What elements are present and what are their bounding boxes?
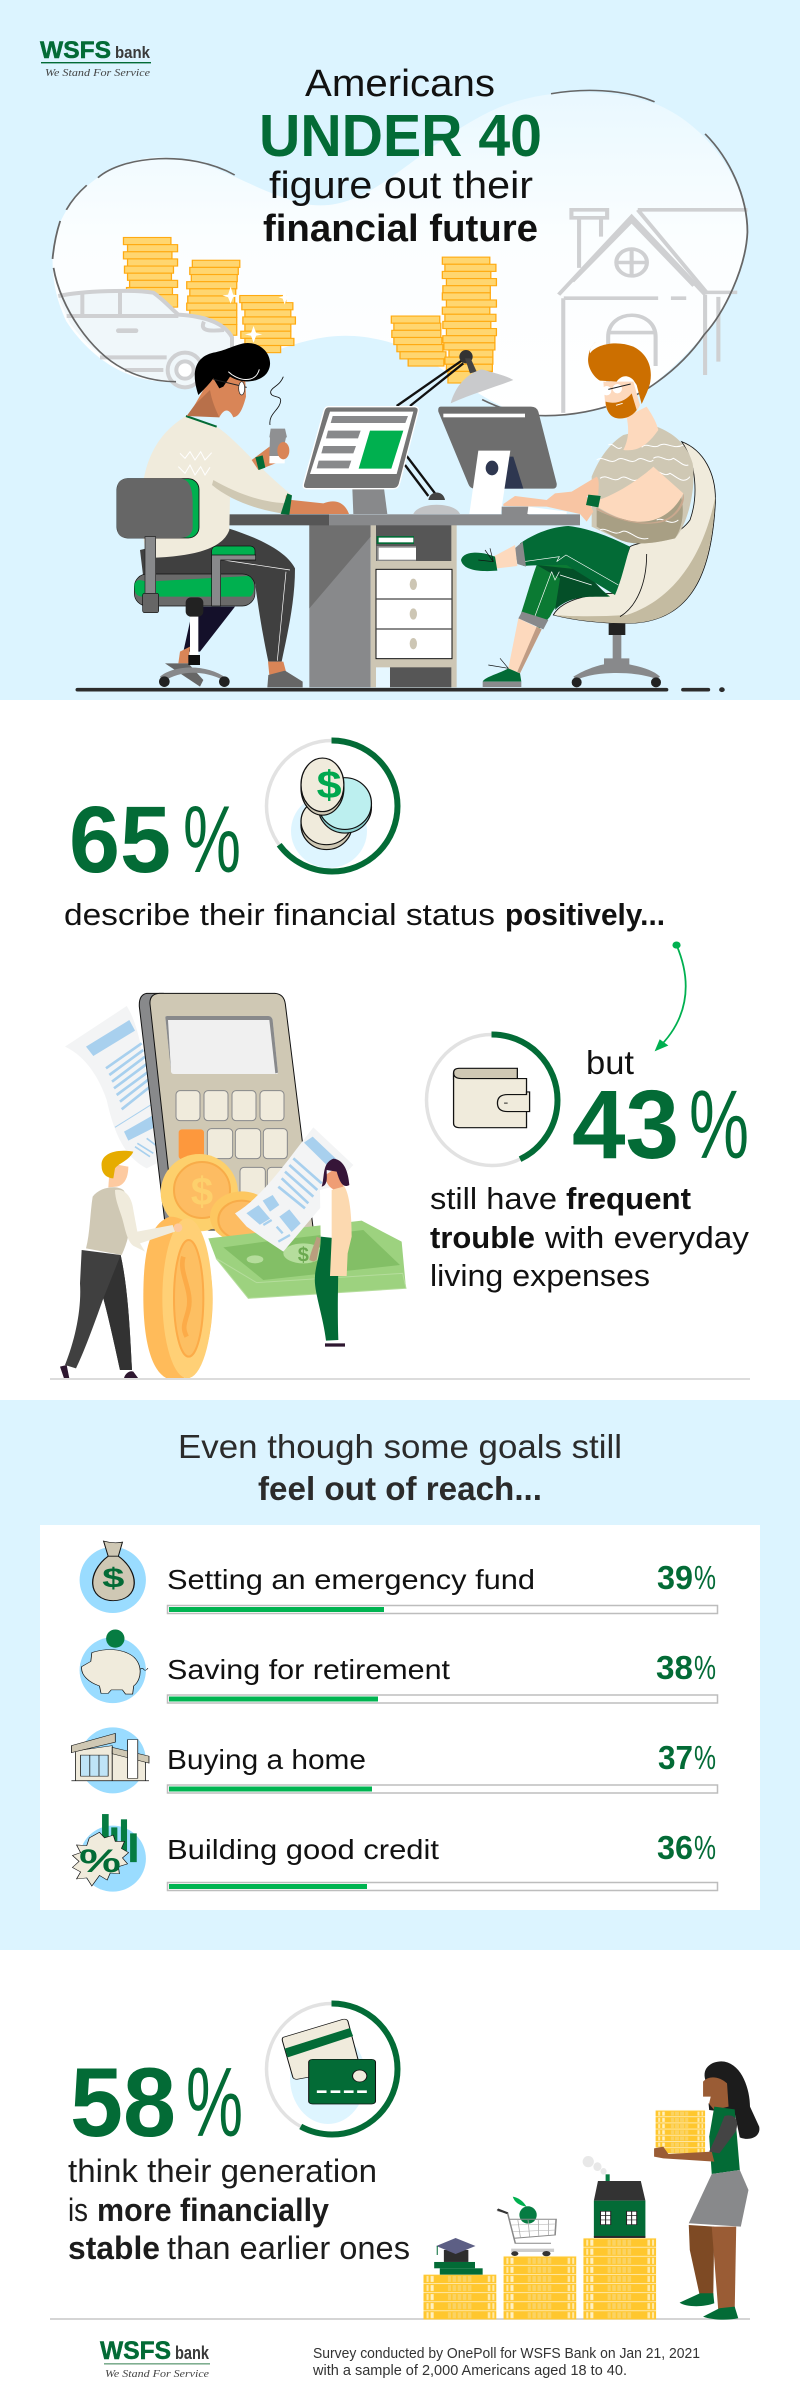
stat: 58 percent: % (186, 2047, 243, 2157)
coin stacks (423, 2238, 656, 2320)
icon: credit percent badge (72, 1814, 146, 1892)
stat: 58 percent: 58 (70, 2047, 176, 2157)
logo: WSFS bank (footer): bank (175, 2343, 210, 2363)
divider (50, 2318, 750, 2320)
text: more financially stable (68, 2153, 410, 2266)
row: credit: % (694, 1829, 716, 1866)
text: frequent trouble: living expenses (430, 1258, 650, 1293)
text: more financially stable: more financially (97, 2192, 329, 2228)
row: home: 37 (658, 1739, 693, 1776)
progress bar 36 (168, 1882, 718, 1890)
arrow: curved green (655, 942, 686, 1051)
shopping cart with apple (497, 2197, 556, 2256)
logo: WSFS bank (footer): We Stand For Service (105, 2368, 209, 2380)
legs and feet (493, 545, 517, 569)
text: frequent trouble: with everyday (544, 1220, 750, 1255)
right monitor (438, 407, 557, 514)
text: more financially stable: is (68, 2192, 88, 2228)
shirt (592, 427, 694, 543)
icon: credit cards (282, 2019, 376, 2104)
progress bar 39 (168, 1606, 718, 1614)
icon: wallet (454, 1068, 530, 1128)
logo: WSFS bank (top): bank (115, 43, 150, 62)
row: credit: 36 (657, 1829, 693, 1866)
heading: goals: Even though some goals still (178, 1428, 622, 1465)
title (259, 63, 542, 250)
blob sketch outline (53, 90, 747, 416)
heading: goals: feel out of reach... (258, 1470, 542, 1507)
heading: goals (178, 1428, 622, 1507)
ring chart: 58 percent with cards (266, 2004, 398, 2134)
ring chart: 43 percent with wallet (426, 1034, 558, 1166)
cash: $ (298, 1245, 309, 1267)
row: retirement (80, 1629, 718, 1703)
sweater (141, 416, 292, 558)
row: credit (72, 1814, 718, 1892)
cuffs (515, 542, 526, 567)
ring chart: 65 percent with coins (266, 740, 398, 872)
divider (50, 1378, 750, 1380)
stat: but 43 percent (572, 1044, 749, 1179)
text: describe positively: positively... (505, 897, 665, 932)
house outline (559, 210, 747, 413)
text: more financially stable: stable (68, 2230, 160, 2266)
icon: money bag: $ (102, 1564, 124, 1594)
armchair (553, 442, 715, 623)
panel: goals background (0, 1400, 800, 1950)
logo: WSFS bank (footer) (100, 2337, 210, 2380)
chair (134, 574, 255, 606)
logo: WSFS bank (footer): WSFS (100, 2337, 171, 2365)
calculator (139, 993, 313, 1230)
stat: 65 percent: 65 (69, 787, 171, 893)
coffee cup and arm (252, 445, 280, 470)
panel: goals card (40, 1525, 760, 1910)
chair back (117, 479, 199, 538)
icon: money bag (80, 1541, 146, 1613)
source note: Survey conducted by OnePoll for WSFS Bank on Jan 21, 2021 (313, 2346, 700, 2362)
graduation cap and books (434, 2238, 483, 2275)
stat: but 43 percent: 43 (572, 1070, 679, 1179)
trousers (140, 528, 295, 662)
stat: but 43 percent: but (586, 1044, 634, 1081)
text: frequent trouble: frequent (566, 1181, 691, 1216)
illustration: coin steps with cap, cart, house and woman (423, 2061, 759, 2320)
row: emergency fund (80, 1541, 718, 1614)
illustration: desk and monitors (229, 350, 580, 687)
row: retirement: Saving for retirement (167, 1654, 450, 1685)
row: home: Buying a home (167, 1744, 366, 1775)
logo: WSFS bank (top): WSFS (40, 37, 111, 64)
row: home (71, 1727, 718, 1793)
title: Americans (305, 63, 495, 105)
woman holding coins (654, 2061, 759, 2320)
text: more financially stable: than earlier ones (167, 2230, 410, 2266)
stat: but 43 percent: % (689, 1070, 749, 1179)
text: frequent trouble (430, 1181, 750, 1293)
source note: with a sample of 2,000 Americans aged 18 to 40. (312, 2363, 627, 2379)
row: retirement: 38 (656, 1649, 693, 1686)
logo: WSFS bank (top) (40, 37, 151, 79)
logo: WSFS bank (top): We Stand For Service (45, 67, 150, 79)
text: more financially stable: think their generation (68, 2153, 377, 2189)
stat: 58 percent (70, 2047, 243, 2157)
man (60, 1151, 182, 1378)
cash (208, 1221, 406, 1298)
text: frequent trouble: trouble (430, 1220, 535, 1255)
row: emergency fund: % (694, 1559, 716, 1596)
icon: piggy bank (80, 1629, 148, 1703)
stat: 65 percent: % (183, 787, 241, 893)
head (195, 370, 246, 417)
title: figure out their (269, 165, 533, 207)
row: emergency fund: Setting an emergency fund (167, 1564, 535, 1595)
head (623, 407, 658, 450)
big coin (143, 1217, 213, 1378)
panel: hero background (0, 0, 800, 700)
far leg and shoe (183, 607, 235, 652)
coins upright (161, 1154, 273, 1242)
arm on desk (283, 495, 349, 514)
text: describe positively (64, 897, 665, 932)
desk (229, 514, 580, 687)
trousers (520, 560, 610, 628)
coins upright: $ (191, 1170, 213, 1214)
ground line (78, 687, 725, 692)
woman (309, 1159, 352, 1347)
arm and keyboard (502, 507, 528, 515)
source note (312, 2346, 700, 2379)
text: frequent trouble: still have (430, 1181, 557, 1216)
small house (583, 2156, 645, 2238)
coin stacks (123, 237, 496, 383)
sparkles (222, 287, 291, 343)
progress bar 37 (168, 1785, 718, 1793)
illustration: calculator, coins, cash and people (60, 993, 406, 1378)
icon: credit percent badge: % (79, 1843, 121, 1879)
receipt left (65, 1006, 160, 1168)
receipt right (235, 1127, 353, 1252)
title: financial future (263, 208, 538, 250)
row: credit: Building good credit (167, 1834, 439, 1865)
row: home: % (694, 1739, 716, 1776)
stat: 65 percent (69, 787, 241, 893)
left monitor (303, 407, 418, 514)
icon: coins: $ (317, 763, 342, 807)
illustration: man with glasses on office chair (117, 343, 349, 687)
background blob with coins, car and house (53, 90, 747, 416)
car outline (57, 290, 234, 387)
row: retirement: % (694, 1649, 716, 1686)
lamp (397, 350, 513, 514)
illustration: bearded man on armchair (461, 342, 715, 687)
progress bar 38 (168, 1695, 718, 1703)
title: UNDER 40 (259, 103, 542, 169)
icon: house (71, 1727, 149, 1793)
row: emergency fund: 39 (657, 1559, 693, 1596)
text: describe positively: describe their financial status (64, 897, 495, 932)
